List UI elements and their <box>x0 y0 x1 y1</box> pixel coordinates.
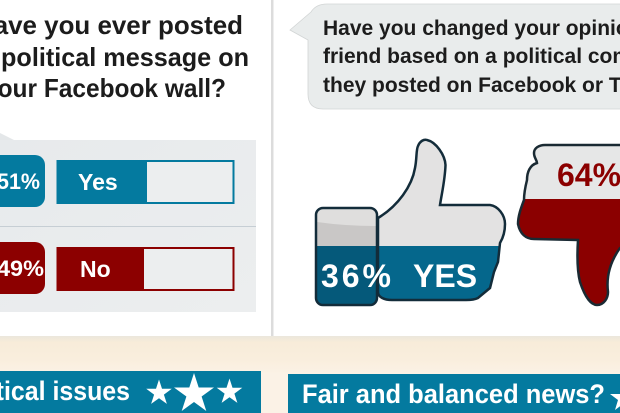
icon: thumbs down 64%: 64% <box>557 157 620 193</box>
no bar <box>57 247 234 290</box>
icon: thumbs up 36% yes: 36% <box>321 258 391 294</box>
icon: thumbs up 36% yes: YES <box>413 258 477 294</box>
yes bar: Yes <box>78 169 118 195</box>
vertical divider <box>271 0 274 336</box>
heading: Facebook wall question <box>0 10 249 103</box>
no badge <box>0 242 45 294</box>
icon: three stars <box>146 373 242 411</box>
icon: star <box>610 384 620 410</box>
no bar: No <box>80 256 111 282</box>
speech bubble: opinion question <box>290 4 620 109</box>
icon: thumbs up 36% yes <box>316 140 505 305</box>
yes badge <box>0 155 45 207</box>
yes bar <box>57 160 234 203</box>
icon: thumbs down 64% <box>518 145 620 305</box>
banner: political issues <box>0 371 261 413</box>
banner: fair and balanced news: Fair and balanced news? <box>302 379 605 409</box>
panel: wall post poll <box>0 133 256 312</box>
cream footer band <box>0 336 620 413</box>
